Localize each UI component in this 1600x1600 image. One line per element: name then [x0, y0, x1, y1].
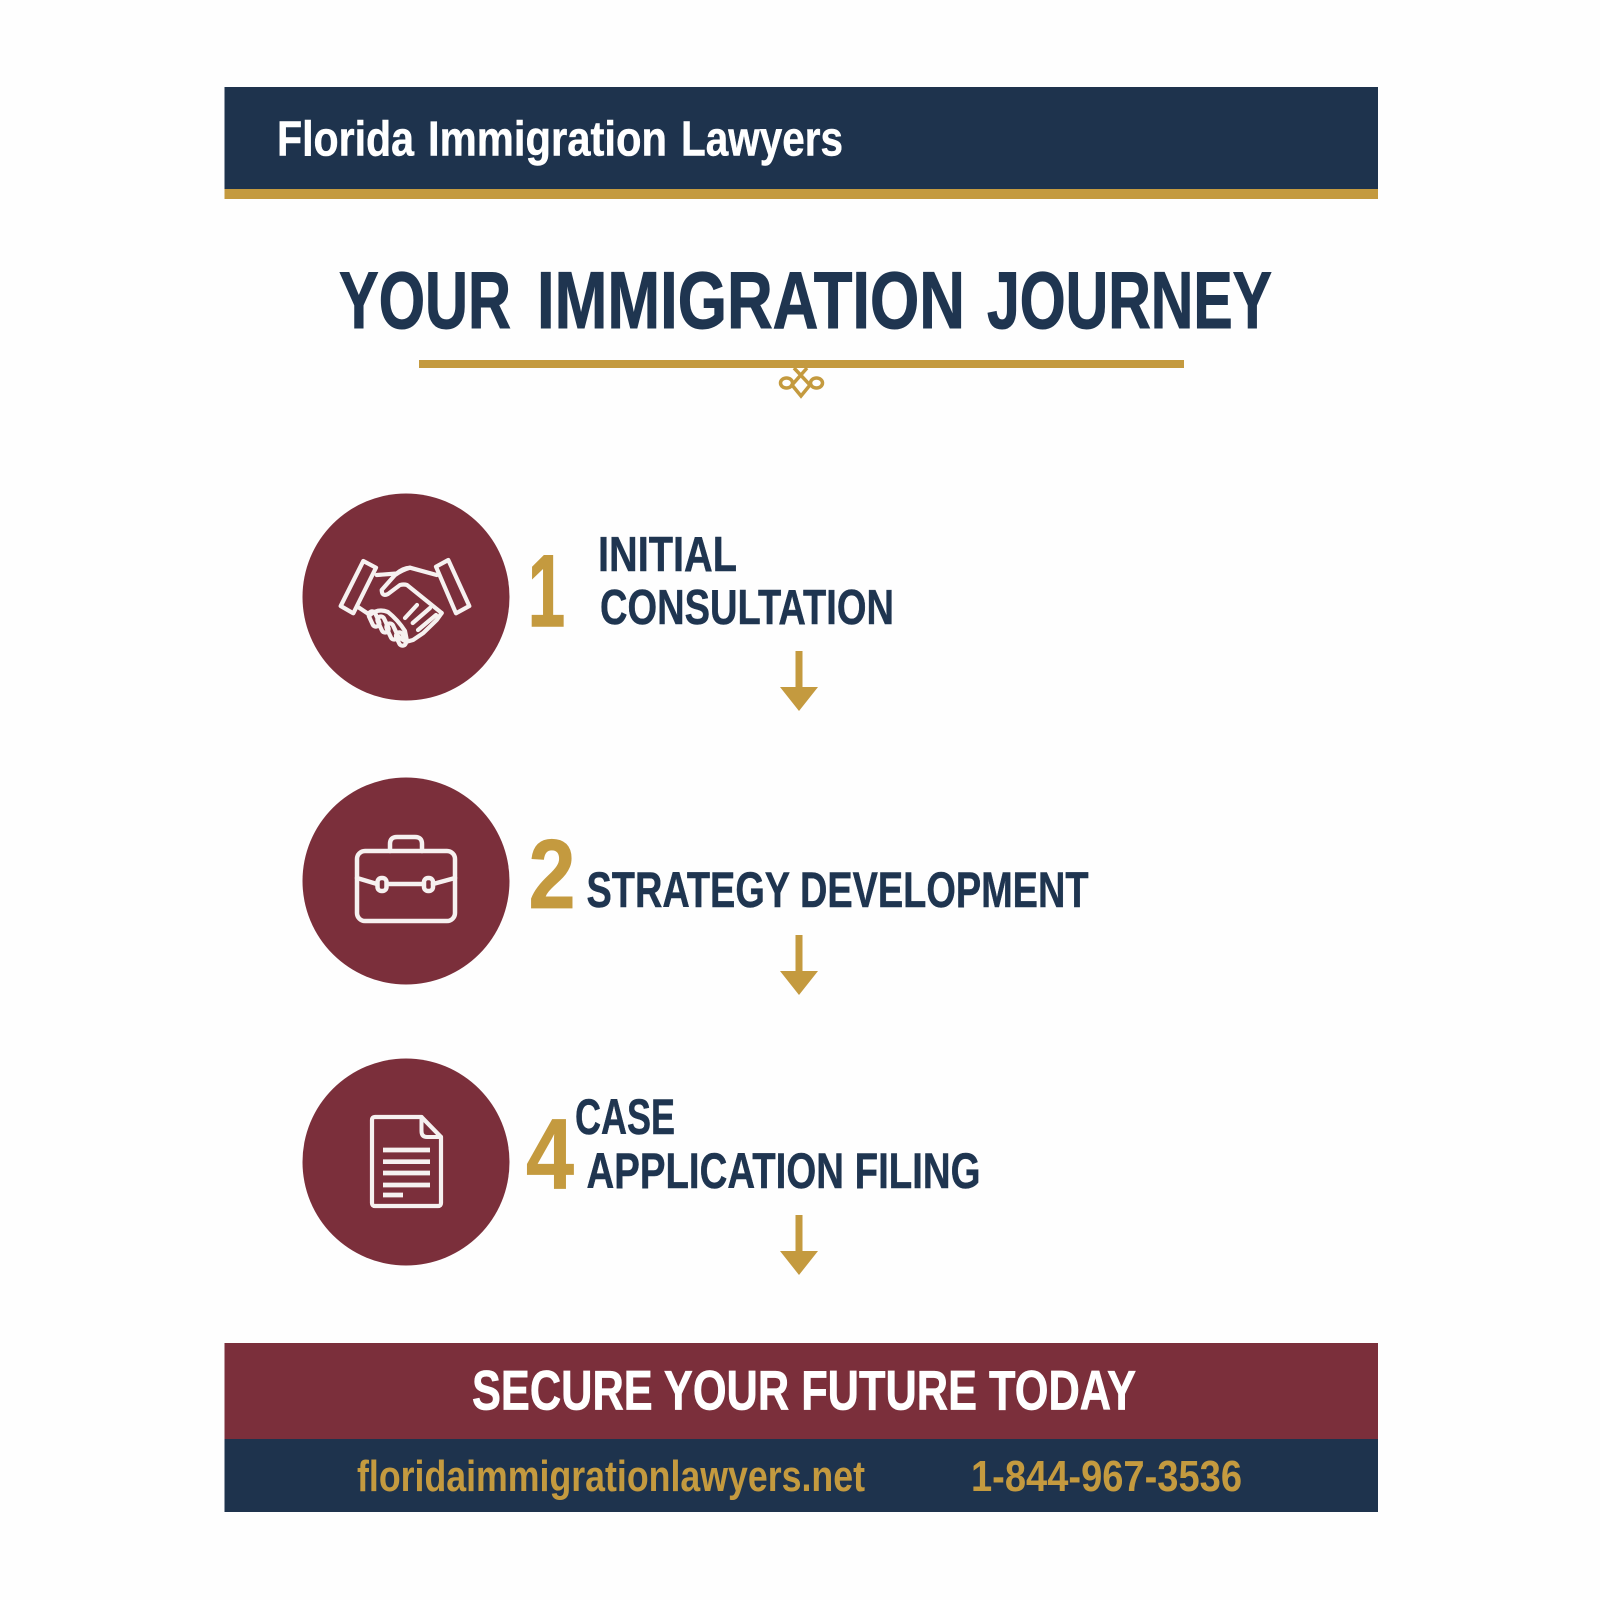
- header banner: [224, 87, 1378, 199]
- title: JOURNEY: [987, 256, 1272, 346]
- arrow 3: [780, 1215, 818, 1275]
- step 3: case application filing: [302, 1058, 980, 1266]
- step 2 label: STRATEGY DEVELOPMENT: [586, 862, 1088, 918]
- step number 1: 1: [528, 534, 565, 648]
- step 1: initial consultation: [302, 494, 894, 700]
- step 3 label: APPLICATION FILING: [586, 1143, 980, 1199]
- step 3 label: CASE: [575, 1089, 675, 1145]
- call to action banner: [224, 1343, 1378, 1439]
- title: [339, 256, 1272, 346]
- phone number: 1-844-967-3536: [971, 1452, 1242, 1501]
- title: YOUR: [339, 256, 511, 346]
- step number 2: 2: [528, 819, 576, 929]
- header firm name: Florida: [277, 112, 415, 166]
- header firm name: Lawyers: [681, 112, 843, 166]
- icon: briefcase in maroon circle: [302, 778, 510, 984]
- header firm name: Immigration: [428, 112, 667, 166]
- arrow 1: [780, 651, 818, 711]
- step number 4: 4: [526, 1098, 574, 1210]
- header firm name: [277, 112, 843, 166]
- step 1 label: CONSULTATION: [600, 580, 894, 635]
- step 1 label: [598, 527, 894, 635]
- title divider with ornament: [419, 360, 1184, 396]
- website: floridaimmigrationlawyers.net: [357, 1452, 865, 1501]
- step 2: strategy development: [302, 778, 1088, 984]
- call to action text: SECURE YOUR FUTURE TODAY: [472, 1358, 1136, 1422]
- icon: document in maroon circle: [302, 1058, 510, 1266]
- arrow 2: [780, 935, 818, 995]
- step 1 label: INITIAL: [598, 527, 737, 582]
- icon: handshake in maroon circle: [302, 494, 510, 700]
- step 3 label: [575, 1089, 980, 1199]
- title: IMMIGRATION: [537, 256, 965, 346]
- contact bar: [224, 1439, 1378, 1512]
